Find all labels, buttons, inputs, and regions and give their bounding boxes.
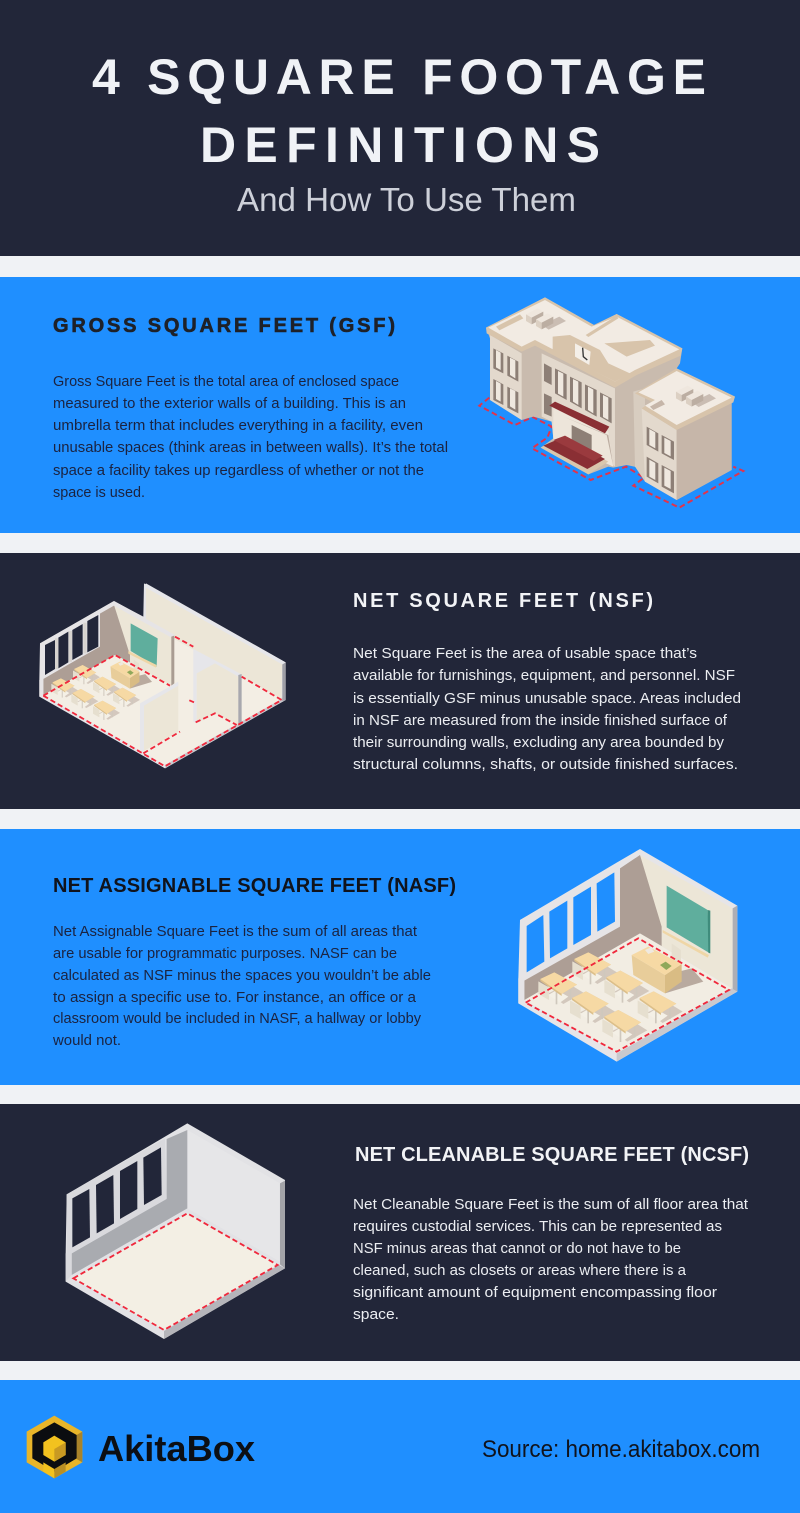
title: DEFINITIONS: [200, 117, 600, 173]
clock tower: [553, 335, 630, 382]
main roof: [486, 297, 682, 388]
text: NSF description: in NSF are measured from the inside finished surface of: [353, 712, 728, 729]
footer panel: [0, 1380, 800, 1513]
heading: NSF: NET SQUARE FEET (NSF): [353, 590, 653, 612]
panel: net assignable square feet: [0, 829, 800, 1085]
dashed boundary: [73, 1213, 278, 1330]
panel: net square feet: [0, 553, 800, 809]
text: GSF description: unusable spaces (think areas in between walls). It’s the total: [53, 439, 448, 456]
right roof: [635, 368, 735, 430]
illustration: floor with classroom and hallway: [39, 583, 286, 768]
chalkboard: [667, 886, 710, 953]
logo wordmark: AkitaBox: [98, 1428, 255, 1469]
dashed boundary: [526, 938, 729, 1052]
steps: [541, 438, 608, 474]
text: NCSF description: cleaned, such as closets or areas where there is a: [353, 1262, 687, 1279]
text: NASF description: to assign a specific use to. For instance, an office or a: [53, 989, 417, 1006]
teacher desk: [110, 660, 152, 689]
window wall frame: [66, 1138, 167, 1282]
building silhouette: [486, 297, 735, 500]
student desks: [51, 665, 140, 720]
text: NCSF description: space.: [353, 1306, 399, 1323]
heading: GSF: GROSS SQUARE FEET (GSF): [53, 315, 395, 337]
dashed boundaries: [43, 637, 282, 766]
text: NCSF description: Net Cleanable Square Feet is the sum of all floor area that: [353, 1196, 749, 1213]
window panes: [45, 615, 98, 675]
text: NASF description: calculated as NSF minus the spaces you wouldn’t be able: [53, 967, 431, 984]
text: NSF description: available for furnishings, equipment, and personnel. NSF: [353, 667, 735, 684]
roof vents: [526, 308, 716, 407]
illustration: empty room: [66, 1123, 285, 1339]
text: NASF description: [52, 923, 431, 1049]
portico: [553, 407, 613, 467]
classroom walls: [114, 606, 172, 686]
right wing: [633, 388, 645, 482]
text: NSF description: is essentially GSF minus unusable space. Areas included: [353, 690, 741, 707]
window wall frame: [518, 864, 620, 1003]
text: NSF description: structural columns, shafts, or outside finished surfaces.: [353, 756, 738, 773]
source credit: Source: home.akitabox.com: [482, 1436, 760, 1463]
heading: NASF: NET ASSIGNABLE SQUARE FEET (NASF): [53, 875, 456, 897]
text: NCSF description: requires custodial services. This can be represented as: [353, 1218, 722, 1235]
illustration: school building: [479, 297, 743, 508]
text: NCSF description: NSF minus areas that cannot or do not have to be: [353, 1240, 681, 1257]
text: NCSF description: significant amount of equipment encompassing floor: [353, 1284, 717, 1301]
text: NASF description: classroom would be included in NASF, a hallway or lobby: [53, 1010, 421, 1027]
text: NASF description: are usable for programmatic purposes. NASF can be: [53, 945, 397, 962]
logo: AkitaBox hexagon: [27, 1416, 82, 1478]
text: NCSF description: [353, 1196, 749, 1323]
text: GSF description: space a facility takes up regardless of whether or not the: [53, 462, 424, 479]
title: 4 SQUARE FOOTAGE: [92, 49, 706, 105]
text: NSF description: their surrounding walls, excluding any area bounded by: [353, 734, 724, 751]
panel: net cleanable square feet: [0, 1104, 800, 1361]
central block: [542, 353, 615, 467]
chalkboard: [131, 623, 158, 667]
header panel: [0, 0, 800, 256]
subtitle: And How To Use Them: [237, 181, 576, 218]
panel: gross square feet: [0, 277, 800, 533]
text: NASF description: Net Assignable Square Feet is the sum of all areas that: [53, 923, 418, 940]
text: GSF description: measured to the exterior walls of a building. This is an: [53, 395, 406, 412]
text: NSF description: [353, 645, 741, 773]
text: GSF description: Gross Square Feet is the total area of enclosed space: [53, 373, 399, 390]
illustration: classroom: [518, 849, 737, 1062]
student desks: [538, 952, 683, 1042]
hall wall: [146, 588, 282, 699]
text: GSF description: umbrella term that includes everything in a facility, even: [53, 417, 423, 434]
partition walls: [197, 662, 238, 725]
heading: NCSF: NET CLEANABLE SQUARE FEET (NCSF): [355, 1144, 749, 1166]
text: GSF description: space is used.: [53, 484, 145, 501]
left wing: [490, 335, 522, 420]
text: GSF description: [53, 373, 448, 501]
teacher desk: [632, 943, 703, 993]
title: [92, 49, 706, 173]
text: NSF description: Net Square Feet is the area of usable space that’s: [353, 645, 697, 662]
text: NASF description: would not.: [52, 1032, 121, 1049]
